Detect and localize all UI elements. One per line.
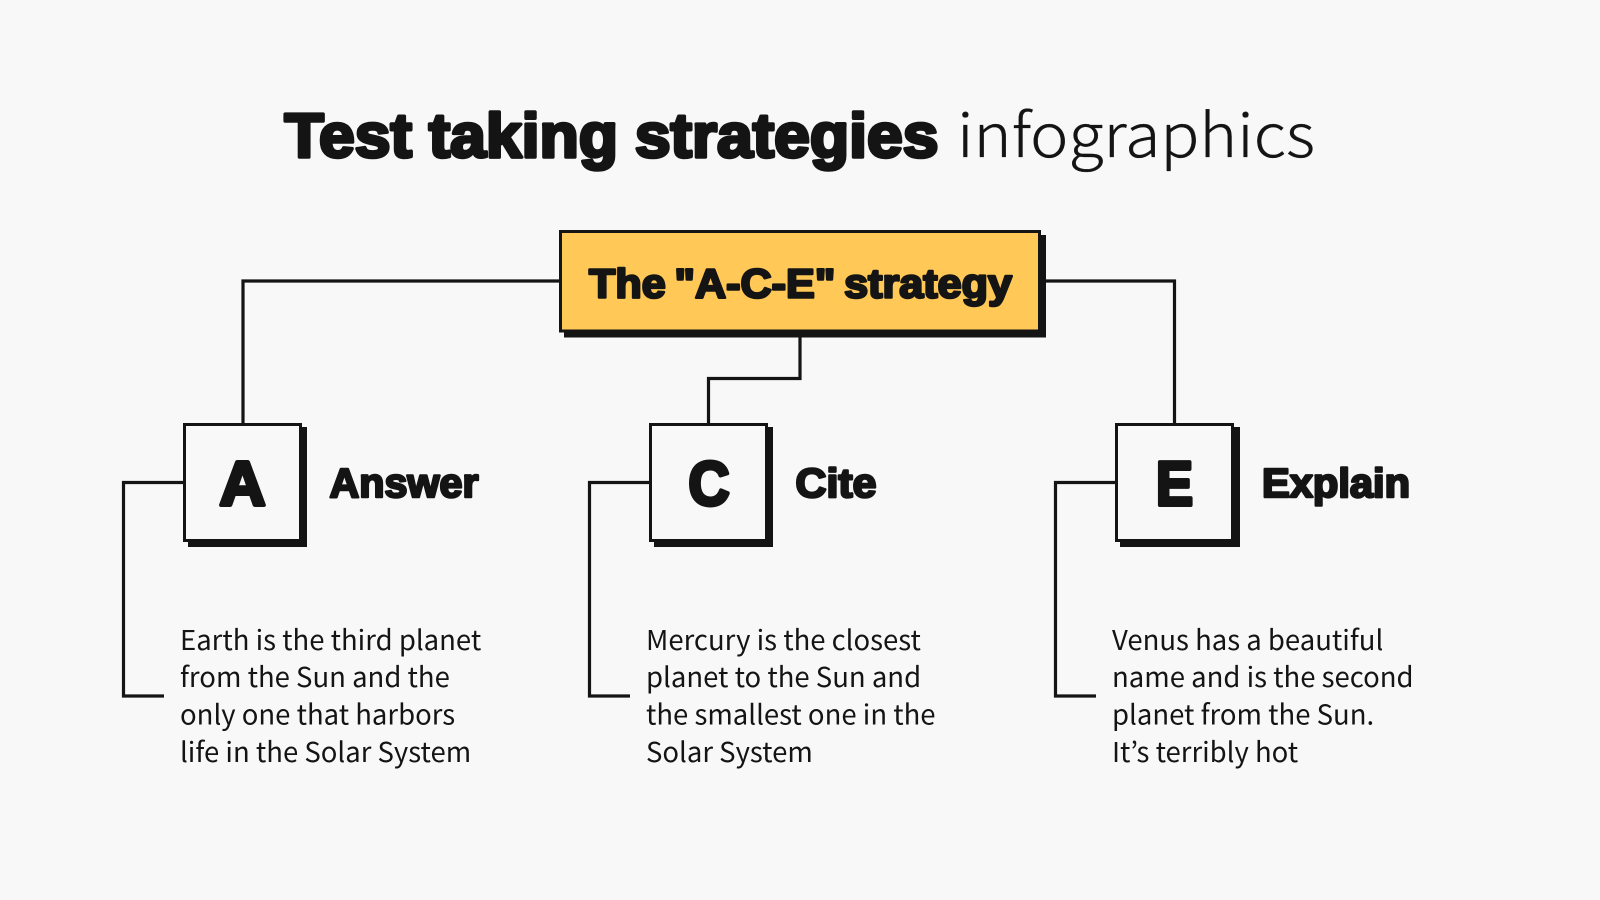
connector: E to description xyxy=(1056,482,1115,696)
letter box: C: C xyxy=(688,450,730,519)
description: Answer: only one that harbors xyxy=(180,692,455,732)
heading: Answer: Answer xyxy=(330,460,479,506)
connector: main box to A xyxy=(243,281,560,423)
heading: Explain: Explain xyxy=(1262,460,1410,506)
connector: A to description xyxy=(124,482,183,696)
description: Cite: Mercury is the closest xyxy=(646,618,921,658)
main box: The A-C-E strategy xyxy=(560,232,1046,338)
description: Explain: It’s terribly hot xyxy=(1112,730,1298,770)
column: Cite xyxy=(590,424,936,770)
description: Answer: life in the Solar System xyxy=(180,730,471,770)
description: Explain: Venus has a beautiful xyxy=(1112,618,1383,658)
title: Test taking strategies xyxy=(284,102,938,171)
main box: The A-C-E strategy: The "A-C-E" strategy xyxy=(589,260,1012,306)
connector: main box to E xyxy=(1044,281,1174,423)
letter box: E xyxy=(1116,424,1240,547)
connector: C to description xyxy=(590,482,649,696)
letter box: E: E xyxy=(1156,450,1193,519)
heading: Cite: Cite xyxy=(796,460,876,506)
column: Answer xyxy=(124,424,481,770)
connector: main box to C xyxy=(708,336,800,423)
title xyxy=(284,88,1315,175)
title: infographics xyxy=(957,88,1315,175)
column: Explain xyxy=(1056,424,1414,770)
description: Cite: planet to the Sun and xyxy=(646,655,921,695)
description: Answer: from the Sun and the xyxy=(180,655,450,695)
description: Answer: Earth is the third planet xyxy=(180,618,481,658)
letter box: C xyxy=(650,424,773,547)
letter box: A xyxy=(184,424,307,547)
description: Cite: the smallest one in the xyxy=(646,692,936,732)
description: Cite: Solar System xyxy=(646,730,813,770)
description: Explain: name and is the second xyxy=(1112,655,1414,695)
description: Explain: planet from the Sun. xyxy=(1112,692,1374,732)
letter box: A: A xyxy=(220,450,266,519)
